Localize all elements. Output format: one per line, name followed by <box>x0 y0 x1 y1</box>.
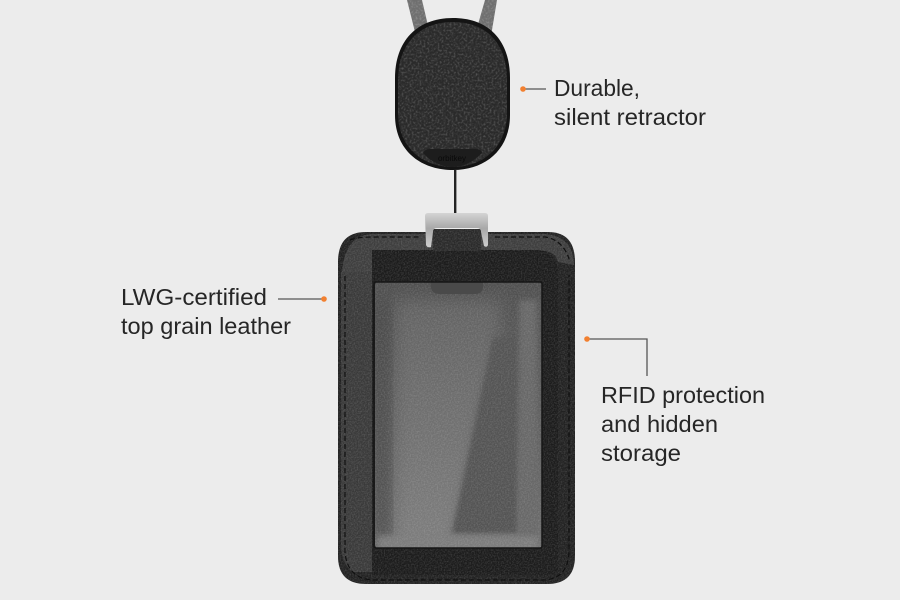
stitching <box>345 237 570 580</box>
left panel highlight <box>341 272 372 572</box>
label text <box>601 382 765 466</box>
marker and leader <box>278 296 327 302</box>
ID holder <box>338 232 575 584</box>
callout: RFID <box>584 336 765 466</box>
retractor <box>395 18 510 170</box>
leather body <box>338 232 575 584</box>
marker and leader <box>520 86 546 92</box>
thumb notch <box>431 282 483 294</box>
brand plate <box>423 149 482 167</box>
connecting wire <box>454 170 456 214</box>
window bottom light strip <box>378 536 538 550</box>
leather face of retractor <box>398 22 507 167</box>
window light patch <box>396 300 500 548</box>
window border <box>374 282 542 548</box>
label text: storage <box>601 440 681 466</box>
window diagonal shade <box>452 338 517 533</box>
callout: leather <box>121 284 327 339</box>
label text: LWG-certified <box>121 284 267 310</box>
top inner panel <box>372 250 558 575</box>
metal clip <box>425 213 488 251</box>
label text <box>554 75 706 130</box>
label text: top grain leather <box>121 313 291 339</box>
label text: RFID protection <box>601 382 765 408</box>
label text: and hidden <box>601 411 718 437</box>
label text: Durable, <box>554 75 640 101</box>
lanyard cords <box>407 0 497 36</box>
strap through clip <box>433 229 481 251</box>
clear window <box>373 282 542 550</box>
window left shade <box>375 300 389 540</box>
upper flap seam band <box>342 234 574 272</box>
callout: retractor <box>520 75 706 130</box>
label text <box>121 284 291 339</box>
marker and leader <box>584 336 647 376</box>
brand name: orbitkey <box>438 154 466 163</box>
window right strip <box>518 300 538 431</box>
label text: silent retractor <box>554 104 706 130</box>
